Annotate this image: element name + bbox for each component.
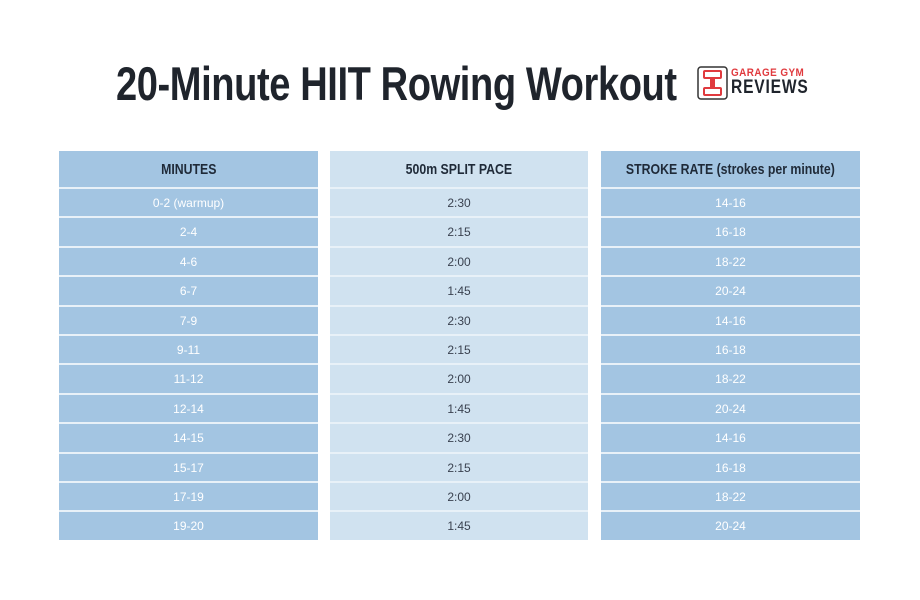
panel: minutes column: 6-7 [180, 284, 197, 298]
panel: split pace column: 2:00 [447, 372, 471, 386]
panel: split pace column: 2:30 [447, 431, 471, 445]
panel: stroke rate column: 16-18 [715, 461, 746, 475]
panel: minutes column: 12-14 [173, 402, 204, 416]
panel: split pace column: 2:15 [447, 461, 471, 475]
title: 20-Minute HIIT Rowing Workout [116, 57, 677, 110]
logo text: REVIEWS [731, 77, 809, 98]
panel: minutes column: 11-12 [174, 372, 203, 386]
panel: stroke rate column: 14-16 [715, 431, 746, 445]
panel: stroke rate column [601, 151, 860, 540]
panel: stroke rate column: STROKE RATE (strokes per minute) [626, 161, 835, 178]
panel: split pace column: 2:30 [447, 314, 471, 328]
panel: stroke rate column: 20-24 [715, 402, 746, 416]
panel: split pace column: 2:00 [447, 490, 471, 504]
panel: stroke rate column: 18-22 [715, 255, 746, 269]
logo [697, 66, 809, 100]
panel: minutes column: 9-11 [177, 343, 200, 357]
panel: stroke rate column: 20-24 [715, 284, 746, 298]
panel: minutes column: 7-9 [180, 314, 197, 328]
panel: minutes column: 17-19 [173, 490, 204, 504]
panel: split pace column: 1:45 [447, 402, 471, 416]
panel: stroke rate column: 14-16 [715, 314, 746, 328]
panel: split pace column: 2:15 [447, 225, 471, 239]
panel: stroke rate column: 18-22 [715, 372, 746, 386]
panel: split pace column [330, 151, 588, 540]
panel: minutes column: 4-6 [180, 255, 197, 269]
panel: stroke rate column: 14-16 [715, 196, 746, 210]
panel: minutes column: 19-20 [173, 519, 204, 533]
panel: split pace column: 2:00 [447, 255, 471, 269]
icon: dumbbell [697, 66, 728, 100]
panel: minutes column: MINUTES [161, 161, 216, 178]
panel: split pace column: 1:45 [447, 519, 471, 533]
panel: split pace column: 500m SPLIT PACE [406, 161, 512, 178]
panel: split pace column: 2:30 [447, 196, 471, 210]
panel: minutes column: 2-4 [180, 225, 197, 239]
panel: stroke rate column: 16-18 [715, 225, 746, 239]
panel: minutes column: 14-15 [173, 431, 204, 445]
logo text: GARAGE GYM [731, 67, 804, 79]
panel: split pace column: 2:15 [447, 343, 471, 357]
logo text [731, 67, 809, 98]
panel: split pace column: 1:45 [447, 284, 471, 298]
panel: stroke rate column: 16-18 [715, 343, 746, 357]
panel: minutes column: 0-2 (warmup) [153, 196, 224, 210]
panel: stroke rate column: 20-24 [715, 519, 746, 533]
panel: stroke rate column: 18-22 [715, 490, 746, 504]
panel: minutes column: 15-17 [173, 461, 204, 475]
panel: minutes column [59, 151, 318, 540]
